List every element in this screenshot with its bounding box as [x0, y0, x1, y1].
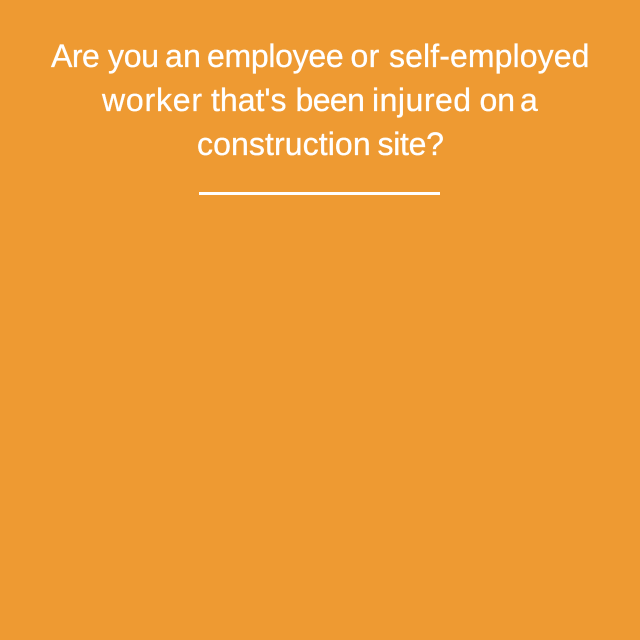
title: you: [108, 38, 159, 74]
title: Are: [51, 38, 99, 74]
title: an: [165, 38, 201, 74]
title: worker: [102, 82, 203, 118]
title: employee: [207, 38, 343, 74]
title: [50, 38, 590, 162]
title: that's: [211, 82, 286, 118]
title: self-employed: [389, 38, 590, 74]
title: or: [350, 38, 380, 74]
title: site?: [378, 126, 444, 162]
title: injured: [372, 82, 472, 118]
title: a: [520, 82, 538, 118]
title: construction: [197, 126, 371, 162]
title underline: [199, 192, 440, 195]
title: been: [296, 82, 364, 118]
title: on: [480, 82, 515, 118]
